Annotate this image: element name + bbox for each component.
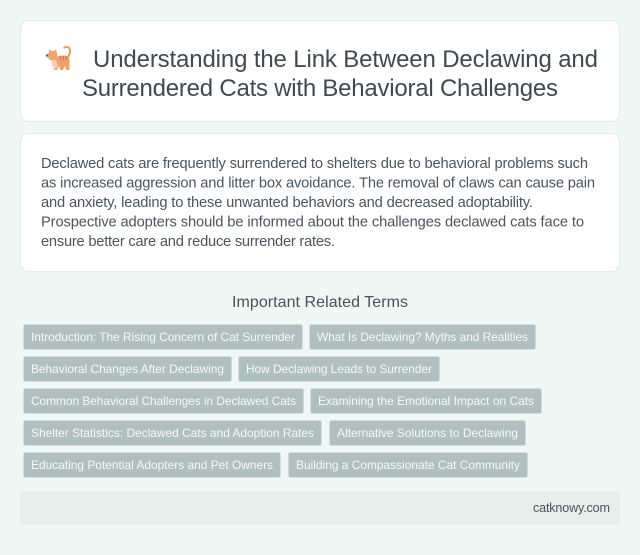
chip: Educating Potential Adopters and Pet Owners [31, 458, 273, 472]
text block: summary: Declawed cats are frequently surrendered to shelters due to behavioral problems such [41, 156, 588, 172]
chip [24, 420, 322, 446]
title: Understanding the Link Between Declawing and [93, 46, 598, 73]
panel: related term chips [24, 324, 542, 478]
text block: summary [41, 156, 595, 250]
chip: Behavioral Changes After Declawing [31, 362, 224, 376]
chip: Examining the Emotional Impact on Cats [318, 394, 534, 408]
heading: related terms: Important Related Terms [232, 294, 408, 311]
chip [24, 356, 232, 382]
chip: Alternative Solutions to Declawing [337, 426, 518, 440]
chip: Shelter Statistics: Declawed Cats and Adoption Rates [31, 426, 314, 440]
chip [330, 420, 526, 446]
chip [24, 324, 302, 350]
chip [24, 388, 304, 414]
chip [288, 452, 528, 478]
footer [20, 491, 620, 525]
text block: summary: Prospective adopters should be informed about the challenges declawed cats face to [41, 214, 584, 230]
panel: title card [20, 20, 620, 122]
chip: Introduction: The Rising Concern of Cat Surrender [31, 330, 295, 344]
title: Surrendered Cats with Behavioral Challenges [82, 75, 558, 102]
icon: cat [46, 47, 70, 70]
text block: summary: as increased aggression and litter box avoidance. The removal of claws can cause pain [41, 176, 595, 192]
chip: Building a Compassionate Cat Community [296, 458, 520, 472]
chip: How Declawing Leads to Surrender [246, 362, 432, 376]
chip [310, 388, 542, 414]
panel: summary card [20, 134, 620, 272]
title [82, 46, 598, 102]
footer: catknowy.com [533, 501, 610, 515]
chip [238, 356, 440, 382]
chip [24, 452, 280, 478]
chip [310, 324, 536, 350]
text block: summary: and anxiety, leading to these unwanted behaviors and decreased adoptability. [41, 195, 533, 211]
chip: Common Behavioral Challenges in Declawed Cats [31, 394, 296, 408]
chip: What Is Declawing? Myths and Realities [317, 330, 528, 344]
text block: summary: ensure better care and reduce surrender rates. [41, 234, 335, 250]
